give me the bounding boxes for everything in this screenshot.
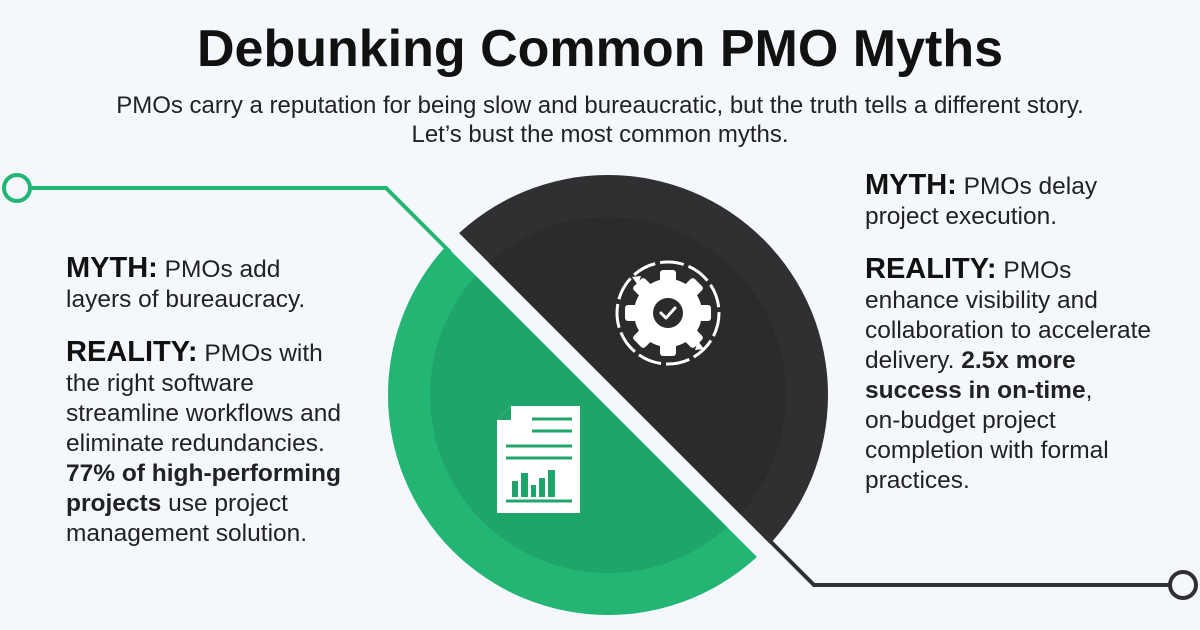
subtitle: Let’s bust the most common myths. xyxy=(411,121,789,148)
left reality: management solution. xyxy=(66,520,307,547)
left reality: streamline workflows and xyxy=(66,400,341,427)
right myth xyxy=(865,169,1097,230)
right reality: collaboration to accelerate xyxy=(865,317,1151,344)
right myth: MYTH: PMOs delay xyxy=(865,169,1097,201)
text block: right myth/reality xyxy=(865,169,1151,494)
left reality: REALITY: PMOs with xyxy=(66,336,323,368)
left reality: the right software xyxy=(66,370,254,397)
left myth: layers of bureaucracy. xyxy=(66,286,305,313)
subtitle: PMOs carry a reputation for being slow and bureaucratic, but the truth tells a different story. xyxy=(116,92,1084,119)
title: Debunking Common PMO Myths xyxy=(197,20,1003,78)
right reality xyxy=(865,253,1151,494)
green connector line xyxy=(4,175,450,252)
left reality xyxy=(66,336,341,547)
left reality: eliminate redundancies. xyxy=(66,430,325,457)
right reality: success in on-time, xyxy=(865,377,1092,404)
right reality: delivery. 2.5x more xyxy=(865,347,1076,374)
icon: gear with cycle arrows xyxy=(617,262,719,364)
left reality: projects use project xyxy=(66,490,288,517)
right reality: completion with formal xyxy=(865,437,1109,464)
icon: report document xyxy=(497,406,580,513)
dark connector line xyxy=(765,536,1196,598)
right reality: on-budget project xyxy=(865,407,1056,434)
left myth xyxy=(66,252,305,313)
dark half xyxy=(459,175,828,544)
right reality: practices. xyxy=(865,467,970,494)
left reality: 77% of high-performing xyxy=(66,460,341,487)
right reality: enhance visibility and xyxy=(865,287,1098,314)
green half xyxy=(388,248,757,615)
diagram: split circle with connectors xyxy=(2,173,1198,615)
right reality: REALITY: PMOs xyxy=(865,253,1071,285)
right myth: project execution. xyxy=(865,203,1057,230)
left myth: MYTH: PMOs add xyxy=(66,252,280,284)
text block: left myth/reality xyxy=(66,252,341,547)
subtitle xyxy=(116,92,1084,148)
